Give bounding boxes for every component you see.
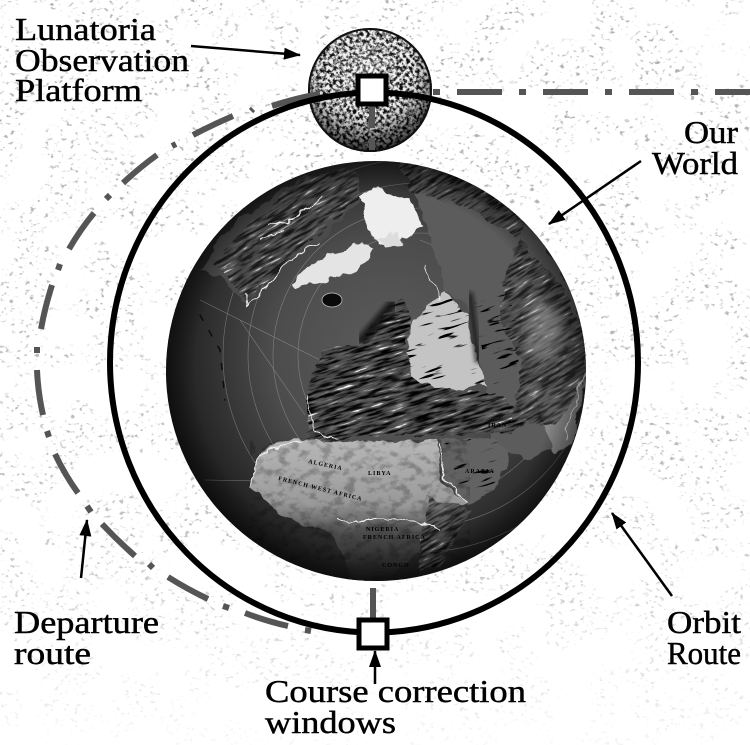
label: Our World: World bbox=[652, 145, 738, 181]
label: Lunatoria Observation Platform: Platform bbox=[15, 72, 142, 108]
siberia and asia bbox=[410, 178, 592, 460]
terminator edge shading bbox=[166, 161, 586, 581]
globe: Our World bbox=[166, 161, 586, 581]
bottom waypoint square bbox=[359, 620, 387, 648]
map labels bbox=[278, 423, 507, 569]
icon: moon Lunatoria bbox=[306, 26, 434, 154]
label: Departure route: Departure bbox=[14, 604, 159, 640]
arabia bbox=[442, 438, 510, 505]
greenland bbox=[290, 242, 374, 288]
label: Course correction windows bbox=[265, 673, 526, 740]
departure route dashed line bbox=[37, 92, 750, 631]
label: Our World bbox=[652, 114, 738, 181]
white arctic island bbox=[360, 190, 421, 245]
india bbox=[535, 380, 585, 455]
orbit route circle bbox=[110, 92, 638, 632]
label: Course correction windows: windows bbox=[265, 704, 396, 740]
graticule lines bbox=[200, 158, 617, 552]
ocean sphere bbox=[166, 161, 586, 581]
map labels: ARABIA bbox=[465, 469, 495, 475]
label: Lunatoria Observation Platform: Lunatoria bbox=[15, 11, 156, 47]
asian highlands glow bbox=[525, 300, 565, 360]
label: Lunatoria Observation Platform bbox=[15, 11, 189, 108]
africa bbox=[250, 440, 467, 582]
label: Our World: Our bbox=[684, 114, 738, 150]
map labels: CONGO bbox=[382, 563, 410, 569]
map labels: FRENCH WEST AFRICA bbox=[278, 476, 363, 503]
label: Lunatoria Observation Platform: Observation bbox=[15, 42, 189, 78]
desert mottling bbox=[250, 440, 470, 560]
arrow: to departure route bbox=[81, 520, 87, 578]
label: Course correction windows: Course correction bbox=[265, 673, 526, 709]
label: Departure route bbox=[14, 604, 159, 671]
iceland bbox=[322, 293, 342, 307]
map labels: IRAN bbox=[488, 423, 507, 429]
rugged asia and arctic terrain bbox=[212, 162, 586, 571]
label: Orbit Route: Orbit bbox=[667, 604, 741, 640]
north america bbox=[200, 173, 362, 303]
label: Departure route: route bbox=[14, 635, 91, 671]
dark name streaks on plains bbox=[406, 281, 518, 494]
map labels: ALGERIA bbox=[308, 459, 343, 472]
arrow: to observation platform bbox=[191, 46, 300, 55]
label: Orbit Route bbox=[667, 604, 741, 671]
label: Orbit Route: Route bbox=[667, 635, 741, 671]
dark ridges bbox=[200, 295, 478, 400]
rugged europe terrain bbox=[306, 298, 531, 442]
european russia plains bbox=[408, 290, 485, 392]
coast highlights bbox=[245, 200, 585, 527]
top waypoint square bbox=[358, 76, 386, 104]
map labels: LIBYA bbox=[368, 471, 391, 477]
arctic island lobe bbox=[376, 233, 402, 247]
arrow: to orbit route bbox=[612, 513, 672, 596]
map labels: FRENCH AFRICA bbox=[363, 535, 426, 541]
arrow: to course correction window bbox=[374, 651, 376, 684]
arrow: to our world bbox=[549, 161, 641, 224]
landmasses bbox=[199, 162, 586, 581]
map labels: NIGERIA bbox=[366, 527, 399, 533]
